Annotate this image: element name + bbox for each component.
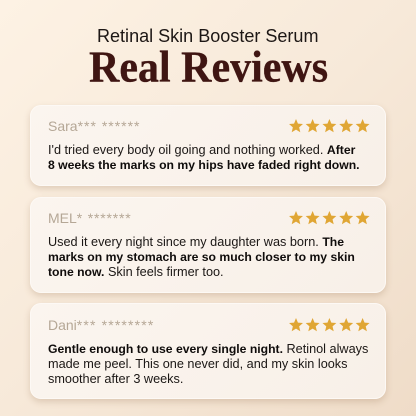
review text: Dani: smoother after 3 weeks. — [48, 372, 183, 386]
review text: MEL: Used it every night since my daughter was born. The — [48, 235, 344, 249]
panel: review by Sara — [30, 105, 386, 186]
star rating: Sara — [289, 119, 370, 132]
reviewer name: MEL: MEL* ******* — [48, 210, 131, 226]
star rating: Dani — [289, 318, 370, 332]
subtitle: Retinal Skin Booster Serum — [97, 26, 318, 46]
reviewer name: Sara: Sara*** ****** — [48, 118, 141, 134]
review text: Dani: made me peel. This one never did, and my skin looks — [48, 357, 348, 371]
review text: Dani: Gentle enough to use every single night. Retinol always — [48, 342, 368, 356]
star rating: MEL — [289, 211, 370, 224]
review text: Sara: I'd tried every body oil going and nothing worked. After — [48, 143, 355, 157]
title: Real Reviews — [89, 44, 328, 92]
review text: MEL: marks on my stomach are so much closer to my skin — [48, 250, 355, 264]
panel: review by Dani — [30, 303, 386, 399]
reviewer name: Dani: Dani*** ******** — [48, 317, 154, 333]
review text: MEL: tone now. Skin feels firmer too. — [48, 265, 224, 279]
review text: MEL — [48, 235, 355, 279]
review text: Sara — [48, 143, 360, 172]
review text: Dani — [48, 342, 368, 386]
panel: review by MEL — [30, 197, 386, 293]
review text: Sara: 8 weeks the marks on my hips have faded right down. — [48, 158, 360, 172]
